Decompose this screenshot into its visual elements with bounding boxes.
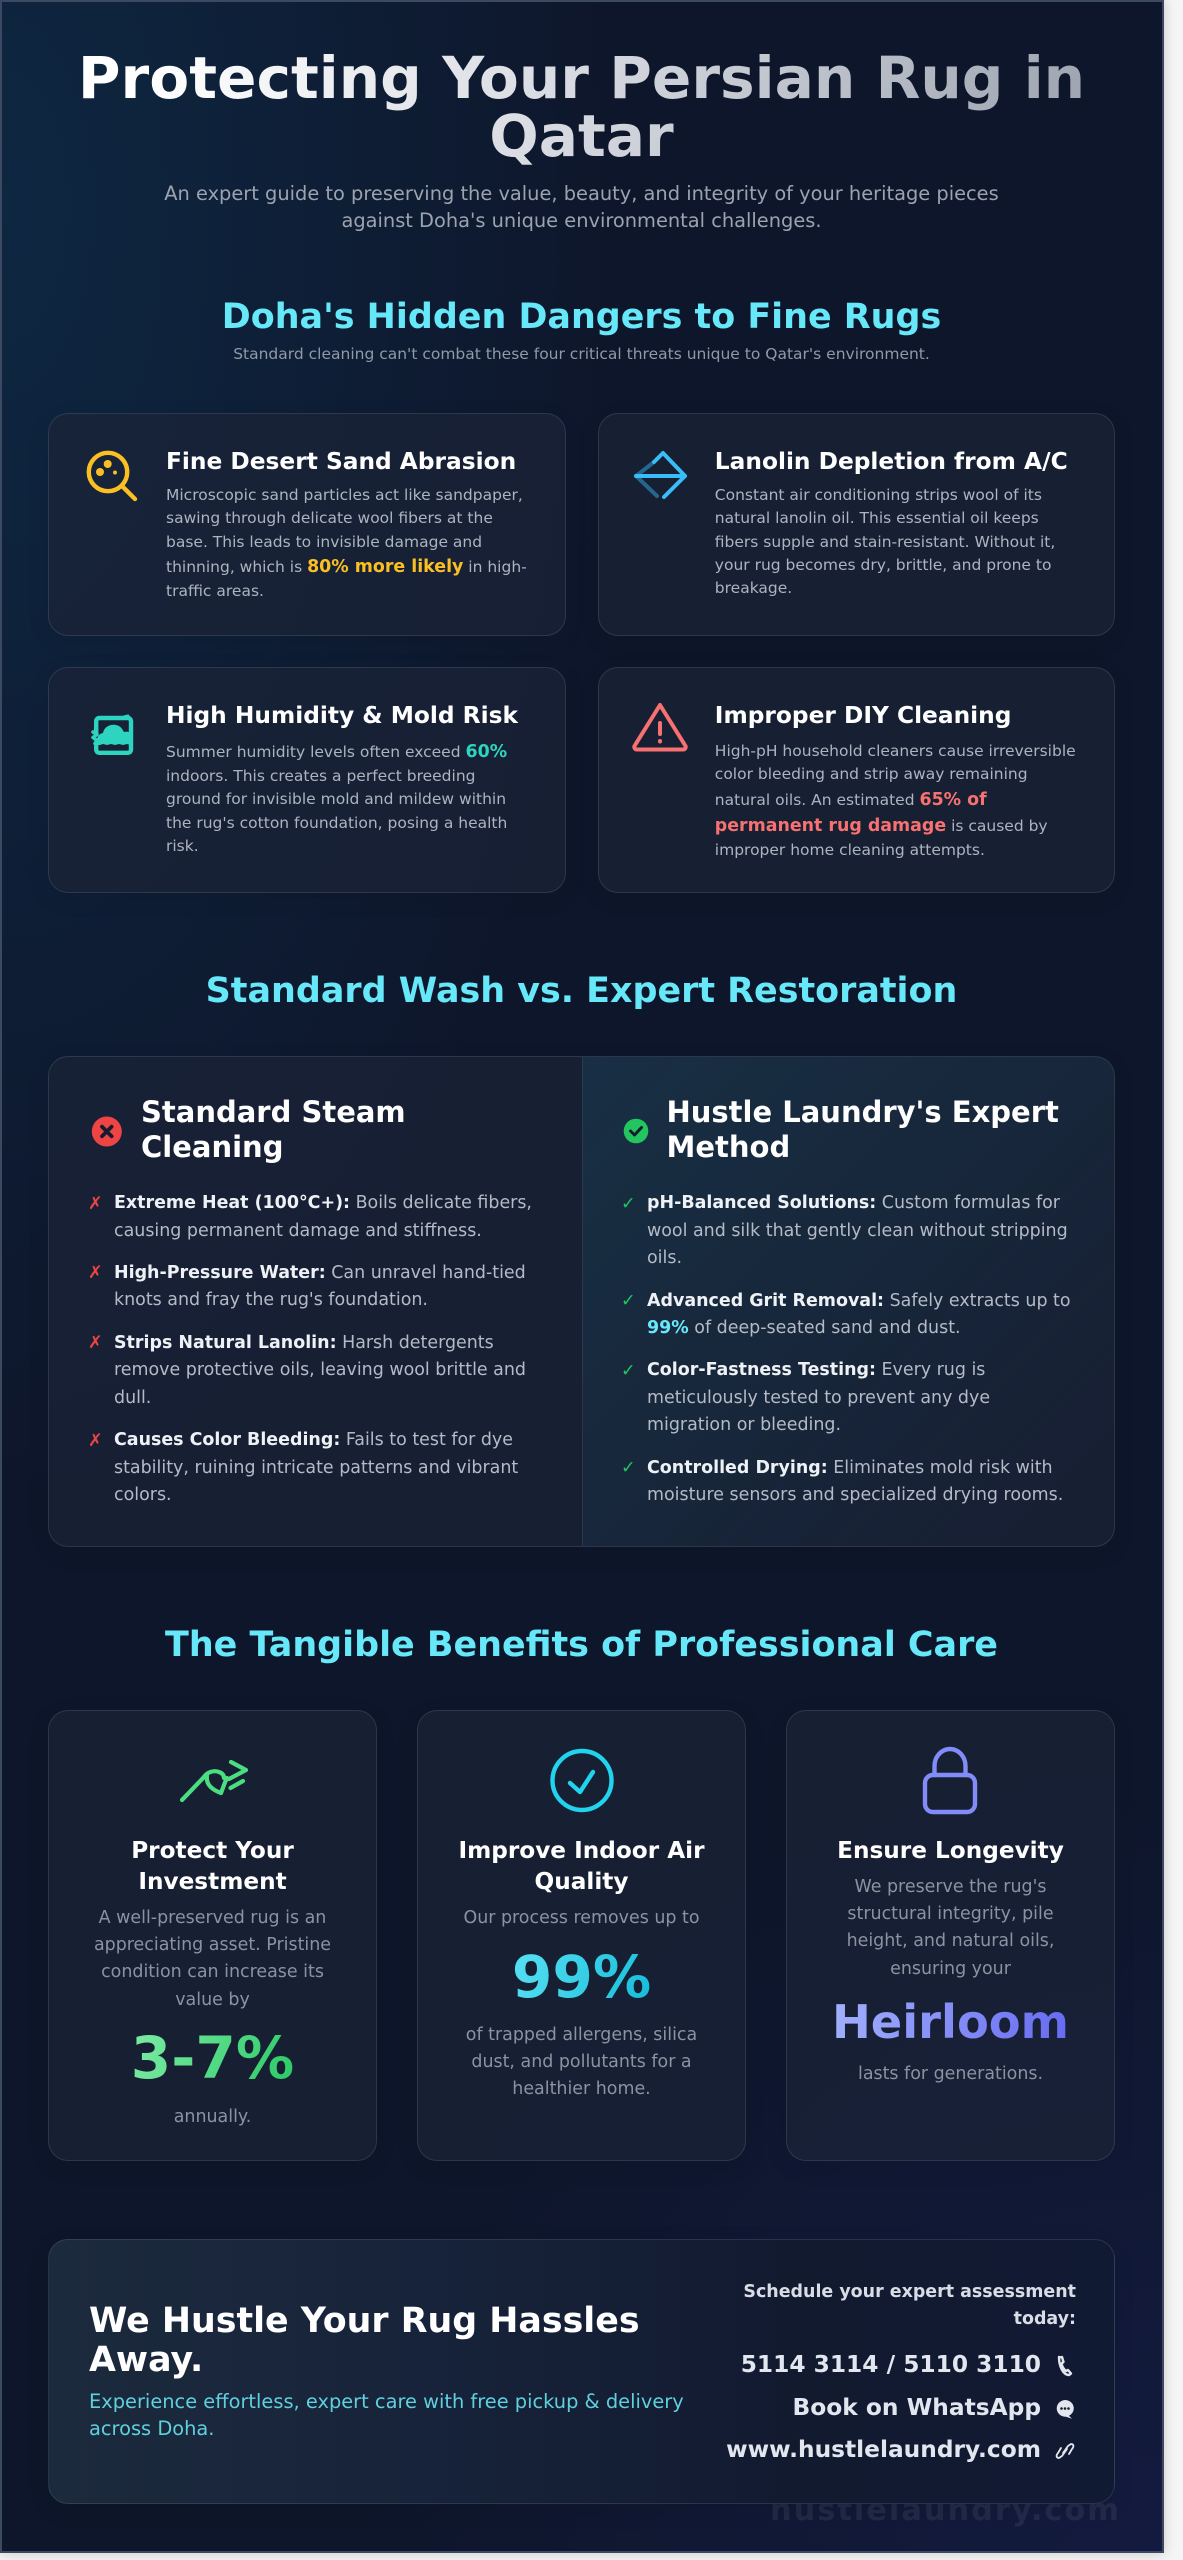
panel: protect investment bbox=[48, 1710, 377, 2161]
heading: hidden dangers: Doha's Hidden Dangers to Fine Rugs bbox=[222, 297, 941, 337]
benefit text: annually. bbox=[174, 2107, 251, 2127]
icon: chat bubble bbox=[1056, 2400, 1074, 2419]
heading: comparison: Standard Wash vs. Expert Restoration bbox=[206, 971, 957, 1011]
item: drying: moisture sensors and specialized drying rooms. bbox=[647, 1485, 1063, 1505]
card text: risk. bbox=[166, 837, 199, 855]
card text: natural oils. An estimated 65% of bbox=[715, 790, 987, 810]
card text: permanent rug damage is caused by bbox=[715, 816, 1048, 836]
card text: base. This leads to invisible damage and bbox=[166, 533, 482, 551]
stat: 99% bbox=[482, 1941, 682, 2013]
benefit text: structural integrity, pile bbox=[847, 1904, 1054, 1924]
item: high pressure: knots and fray the rug's foundation. bbox=[114, 1290, 428, 1310]
CTA subtext: Experience effortless, expert care with free pickup & delivery bbox=[89, 2390, 684, 2413]
CTA website: www.hustlelaundry.com bbox=[726, 2436, 1041, 2463]
panel: air quality bbox=[417, 1710, 746, 2161]
card heading: Lanolin Depletion from A/C bbox=[715, 448, 1068, 474]
benefit heading: Ensure Longevity bbox=[837, 1837, 1064, 1864]
item: lanolin: dull. bbox=[114, 1388, 151, 1408]
stat: 3-7%: 3-7% bbox=[131, 2024, 294, 2092]
benefit heading: Quality bbox=[535, 1868, 628, 1895]
cross mark: ✗ bbox=[88, 1431, 103, 1451]
item: high pressure: High-Pressure Water: Can unravel hand-tied bbox=[114, 1262, 526, 1282]
item: grit removal: Advanced Grit Removal: Safely extracts up to bbox=[647, 1290, 1071, 1310]
icon: red cross bbox=[92, 1116, 122, 1146]
panel: improper DIY cleaning bbox=[598, 667, 1115, 893]
subtitle bbox=[164, 182, 999, 232]
title: Protecting Your Persian Rug in bbox=[78, 44, 1085, 112]
card text: sawing through delicate wool fibers at the bbox=[166, 509, 493, 527]
item: grit removal bbox=[647, 1290, 1071, 1338]
check mark: ✓ bbox=[621, 1291, 636, 1311]
icon: check circle bbox=[550, 1748, 614, 1812]
item: color bleeding bbox=[114, 1430, 518, 1505]
benefit text: height, and natural oils, bbox=[847, 1931, 1054, 1951]
item: pH balanced: pH-Balanced Solutions: Custom formulas for bbox=[647, 1193, 1060, 1213]
item: color fastness: meticulously tested to prevent any dye bbox=[647, 1388, 990, 1408]
CTA schedule text: Schedule your expert assessment bbox=[743, 2282, 1076, 2302]
item: color fastness: migration or bleeding. bbox=[647, 1415, 841, 1435]
benefit text: lasts for generations. bbox=[858, 2064, 1043, 2084]
item: drying bbox=[647, 1458, 1063, 1505]
card text: natural lanolin oil. This essential oil keeps bbox=[715, 509, 1039, 527]
card text: indoors. This creates a perfect breeding bbox=[166, 767, 476, 785]
card text: Constant air conditioning strips wool of its bbox=[715, 486, 1042, 504]
subtitle: An expert guide to preserving the value, beauty, and integrity of your heritage pieces bbox=[164, 182, 999, 205]
benefit heading bbox=[458, 1837, 705, 1895]
card text: improper home cleaning attempts. bbox=[715, 841, 985, 859]
benefit text: We preserve the rug's bbox=[854, 1877, 1046, 1897]
benefit heading: Protect Your bbox=[131, 1837, 294, 1864]
panel: comparison bbox=[48, 1056, 1115, 1547]
item: lanolin: Strips Natural Lanolin: Harsh detergents bbox=[114, 1332, 494, 1352]
cross mark: ✗ bbox=[88, 1333, 103, 1353]
icon: mold box bbox=[91, 714, 134, 755]
item: color fastness: Color-Fastness Testing: Every rug is bbox=[647, 1360, 985, 1380]
watermark: hustlelaundry.com bbox=[770, 2493, 1121, 2528]
CTA schedule text bbox=[743, 2282, 1076, 2329]
list: expert method benefits bbox=[621, 1193, 1071, 1505]
subtitle: against Doha's unique environmental challenges. bbox=[341, 209, 822, 232]
benefit text: Our process removes up to bbox=[463, 1908, 700, 1928]
benefit text: dust, and pollutants for a bbox=[471, 2052, 692, 2072]
benefit text: healthier home. bbox=[512, 2079, 651, 2099]
card text bbox=[166, 742, 507, 855]
heading: benefits: The Tangible Benefits of Professional Care bbox=[165, 1625, 998, 1665]
icon: warning triangle bbox=[632, 702, 688, 752]
item: lanolin: remove protective oils, leaving wool brittle and bbox=[114, 1360, 526, 1380]
card text bbox=[715, 486, 1055, 597]
card text: traffic areas. bbox=[166, 582, 264, 600]
column heading: steam cleaning: Cleaning bbox=[141, 1130, 283, 1164]
icon: green hand bbox=[180, 1760, 248, 1802]
benefit heading bbox=[131, 1837, 294, 1895]
benefit text: of trapped allergens, silica bbox=[466, 2025, 697, 2045]
benefit text bbox=[94, 1908, 331, 2010]
CTA subtext: across Doha. bbox=[89, 2417, 214, 2440]
column heading: expert method bbox=[666, 1095, 1059, 1164]
panel: longevity bbox=[786, 1710, 1115, 2161]
item: extreme heat bbox=[114, 1193, 532, 1240]
benefit text bbox=[466, 2025, 697, 2099]
item: color bleeding: Causes Color Bleeding: Fails to test for dye bbox=[114, 1430, 513, 1450]
CTA heading: Away. bbox=[89, 2340, 203, 2380]
section sub-heading: Standard cleaning can't combat these four critical threats unique to Qatar's environment. bbox=[233, 345, 930, 363]
column heading: steam cleaning: Standard Steam bbox=[141, 1095, 406, 1129]
card text: color bleeding and strip away remaining bbox=[715, 765, 1028, 783]
benefit heading: Improve Indoor Air bbox=[458, 1837, 705, 1864]
card heading: Fine Desert Sand Abrasion bbox=[166, 448, 516, 474]
column heading: expert method: Method bbox=[666, 1130, 790, 1164]
card text bbox=[166, 486, 527, 600]
card text: the rug's cotton foundation, posing a health bbox=[166, 814, 507, 832]
benefit text: value by bbox=[175, 1990, 250, 2010]
panel: lanolin depletion bbox=[598, 413, 1115, 636]
icon: magnifier with sand bbox=[86, 450, 138, 502]
item: pH balanced: oils. bbox=[647, 1248, 682, 1268]
stat: 99%: 99% bbox=[512, 1943, 651, 2011]
cross mark: ✗ bbox=[88, 1194, 103, 1214]
card text: High-pH household cleaners cause irreversible bbox=[715, 742, 1076, 760]
card text: Microscopic sand particles act like sandpaper, bbox=[166, 486, 523, 504]
title: Qatar bbox=[489, 102, 674, 170]
benefit text bbox=[847, 1877, 1054, 1979]
CTA heading bbox=[89, 2301, 640, 2380]
item: color bleeding: stability, ruining intricate patterns and vibrant bbox=[114, 1458, 518, 1478]
panel: sand abrasion bbox=[48, 413, 566, 636]
icon: lanolin diamond bbox=[634, 450, 688, 500]
item: color fastness bbox=[647, 1360, 990, 1435]
item: extreme heat: Extreme Heat (100°C+): Boils delicate fibers, bbox=[114, 1193, 532, 1213]
icon: link bbox=[1056, 2443, 1074, 2459]
item: pH balanced bbox=[647, 1193, 1068, 1268]
card text: breakage. bbox=[715, 579, 792, 597]
icon: green check bbox=[624, 1118, 648, 1144]
item: extreme heat: causing permanent damage and stiffness. bbox=[114, 1220, 482, 1240]
item: high pressure bbox=[114, 1262, 526, 1310]
CTA whatsapp: Book on WhatsApp bbox=[793, 2394, 1041, 2421]
card text bbox=[715, 742, 1076, 859]
CTA subtext bbox=[89, 2390, 684, 2440]
icon: padlock bbox=[922, 1746, 978, 1814]
card text: fibers supple and stain-resistant. Without it, bbox=[715, 533, 1055, 551]
column heading: expert method: Hustle Laundry's Expert bbox=[666, 1095, 1059, 1129]
card heading: Improper DIY Cleaning bbox=[715, 702, 1011, 728]
card text: ground for invisible mold and mildew within bbox=[166, 790, 506, 808]
CTA heading: We Hustle Your Rug Hassles bbox=[89, 2301, 640, 2341]
benefit heading: Investment bbox=[138, 1868, 287, 1895]
benefit text: appreciating asset. Pristine bbox=[94, 1935, 331, 1955]
stat: Heirloom: Heirloom bbox=[832, 1995, 1069, 2049]
cross mark: ✗ bbox=[88, 1263, 103, 1283]
item: grit removal: 99% of deep-seated sand and dust. bbox=[647, 1318, 961, 1338]
check mark: ✓ bbox=[621, 1361, 636, 1381]
benefit text: condition can increase its bbox=[101, 1962, 324, 1982]
CTA schedule text: today: bbox=[1014, 2309, 1076, 2329]
list: steam cleaning drawbacks bbox=[88, 1193, 532, 1505]
card heading: High Humidity & Mold Risk bbox=[166, 702, 518, 728]
CTA phone: 5114 3114 / 5110 3110 bbox=[741, 2351, 1041, 2378]
check mark: ✓ bbox=[621, 1194, 636, 1214]
icon: phone bbox=[1058, 2356, 1072, 2376]
title bbox=[78, 44, 1085, 170]
column heading: steam cleaning bbox=[141, 1095, 406, 1164]
panel: expert method background bbox=[582, 1057, 1115, 1546]
benefit text: A well-preserved rug is an bbox=[99, 1908, 326, 1928]
check mark: ✓ bbox=[621, 1458, 636, 1478]
card text: your rug becomes dry, brittle, and prone to bbox=[715, 556, 1051, 574]
benefit text: ensuring your bbox=[890, 1959, 1011, 1979]
item: drying: Controlled Drying: Eliminates mold risk with bbox=[647, 1458, 1053, 1478]
item: lanolin bbox=[114, 1332, 526, 1408]
item: pH balanced: wool and silk that gently clean without stripping bbox=[647, 1220, 1068, 1240]
panel: humidity and mold bbox=[48, 667, 566, 893]
card text: thinning, which is 80% more likely in high- bbox=[166, 557, 527, 577]
card text: Summer humidity levels often exceed 60% bbox=[166, 742, 507, 762]
item: color bleeding: colors. bbox=[114, 1485, 172, 1505]
panel: call to action bbox=[48, 2239, 1115, 2504]
